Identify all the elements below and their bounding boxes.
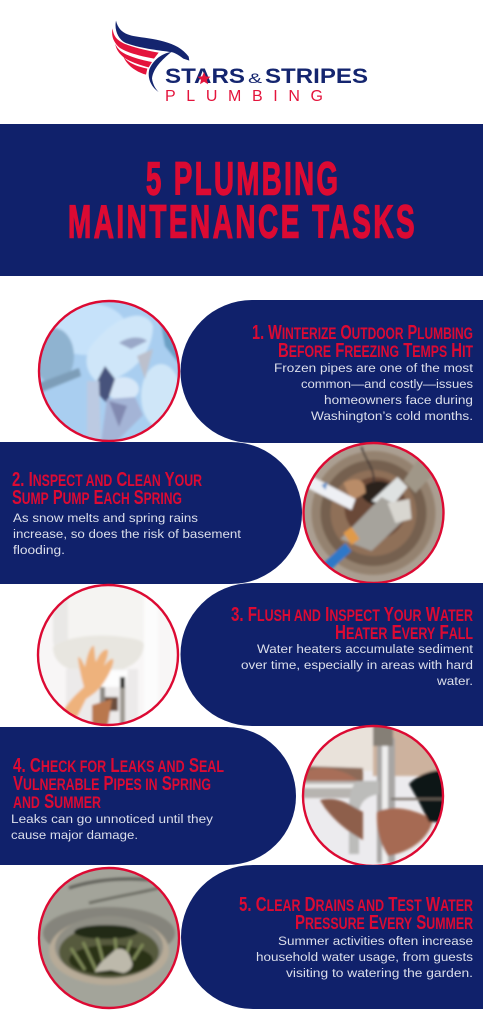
- panel 4: leaks: [0, 727, 296, 865]
- body 3: [241, 642, 474, 688]
- logo: Stars & Stripes Plumbing: [112, 21, 368, 105]
- body 2: [13, 511, 242, 557]
- body 5: household water usage, from guests: [256, 950, 473, 964]
- logo: Stars & Stripes Plumbing: &: [248, 70, 263, 86]
- body 1: homeowners face during: [324, 393, 473, 407]
- body 3: Water heaters accumulate sediment: [257, 642, 474, 656]
- heading 5: PRESSURE EVERY SUMMER: [295, 912, 473, 934]
- photo 2: sump pump pit: [302, 441, 446, 585]
- heading 1: [252, 322, 473, 362]
- heading 2: [12, 469, 202, 509]
- body 1: common—and costly—issues: [301, 377, 473, 391]
- heading 2: 2. INSPECT AND CLEAN YOUR: [12, 469, 202, 491]
- icon: eagle wing: [112, 21, 189, 92]
- body 3: over time, especially in areas with hard: [241, 658, 473, 672]
- heading 5: [239, 894, 473, 934]
- logo: Stars & Stripes Plumbing: STRIPES: [265, 65, 368, 88]
- heading 2: SUMP PUMP EACH SPRING: [12, 487, 182, 509]
- title: 5 PLUMBING: [146, 154, 338, 205]
- body 2: increase, so does the risk of basement: [13, 527, 242, 541]
- logo wordmark: STARS: [165, 65, 245, 88]
- heading 3: [231, 604, 473, 644]
- body 1: [274, 361, 474, 423]
- panel 2: sump pump: [0, 442, 302, 584]
- body 1: Washington’s cold months.: [311, 409, 473, 423]
- photo 3: water heater: [36, 583, 180, 727]
- panel 1: winterize: [180, 300, 483, 443]
- photo 5: swirling drain: [37, 866, 181, 1010]
- body 2: flooding.: [13, 543, 65, 557]
- heading 4: AND SUMMER: [13, 791, 101, 813]
- body 1: Frozen pipes are one of the most: [274, 361, 474, 375]
- logo subline: PLUMBING: [165, 88, 323, 105]
- title band: [0, 124, 483, 276]
- title: MAINTENANCE TASKS: [68, 198, 415, 248]
- heading 5: 5. CLEAR DRAINS AND TEST WATER: [239, 894, 473, 916]
- panel 5: drains: [181, 865, 483, 1009]
- body 5: [256, 934, 473, 980]
- body 5: visiting to watering the garden.: [286, 966, 473, 980]
- body 2: As snow melts and spring rains: [13, 511, 198, 525]
- heading 4: VULNERABLE PIPES IN SPRING: [13, 773, 211, 795]
- heading 1: BEFORE FREEZING TEMPS HIT: [278, 340, 473, 362]
- photo 4: plumber at pipes: [301, 724, 445, 868]
- heading 4: [13, 755, 224, 813]
- heading 3: HEATER EVERY FALL: [335, 622, 473, 644]
- title: [68, 154, 415, 248]
- photo 1: frozen pipe: [34, 299, 181, 443]
- heading 3: 3. FLUSH AND INSPECT YOUR WATER: [231, 604, 473, 626]
- logo star: [197, 72, 210, 84]
- body 4: Leaks can go unnoticed until they: [11, 812, 214, 826]
- heading 4: 4. CHECK FOR LEAKS AND SEAL: [13, 755, 224, 777]
- body 4: [11, 812, 214, 842]
- body 3: water.: [436, 674, 473, 688]
- panel 3: water heater: [180, 583, 483, 726]
- body 5: Summer activities often increase: [278, 934, 473, 948]
- body 4: cause major damage.: [11, 828, 138, 842]
